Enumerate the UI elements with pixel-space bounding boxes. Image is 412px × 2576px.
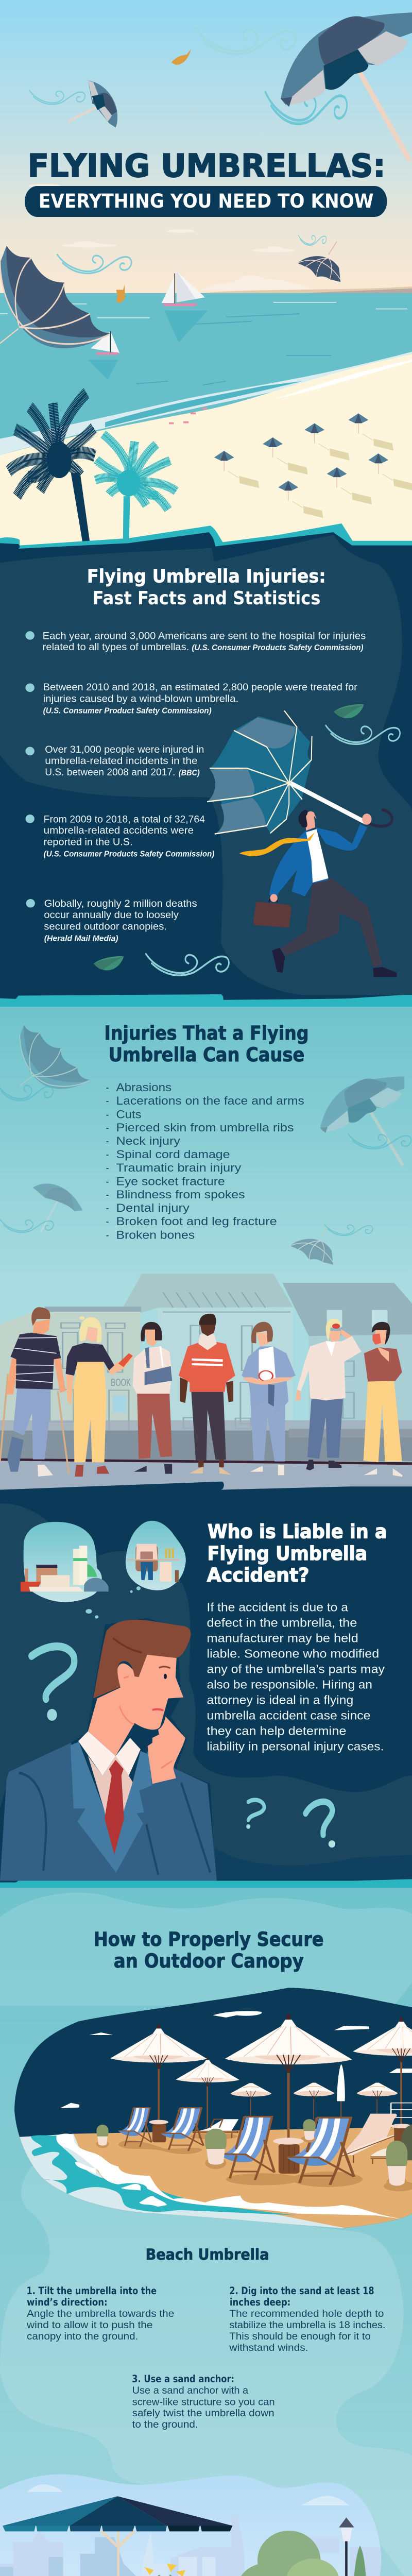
lighter blobs — [0, 1503, 412, 1879]
lamp post — [339, 2518, 354, 2576]
bullet 4: umbrella-related accidents were — [44, 824, 194, 836]
paragraph: liability: defect in the umbrella, the — [207, 1617, 357, 1630]
person 3 with arm sling — [133, 1322, 172, 1474]
illustration: thinking man — [0, 1620, 217, 1881]
heading: who is liable: Flying Umbrella — [208, 1543, 367, 1565]
bullet 2: Between 2010 and 2018, an estimated 2,800 people were treated for — [43, 681, 357, 692]
heading: Beach Umbrella — [146, 2246, 269, 2264]
injuries list: - — [106, 1095, 109, 1108]
tip 3: safely twist the umbrella down — [132, 2407, 274, 2419]
jacket — [269, 824, 367, 900]
bullet 5 — [26, 898, 197, 943]
icon: palm trees — [9, 393, 176, 542]
lighter blob — [0, 535, 412, 995]
briefcase — [253, 898, 291, 927]
sky — [0, 2471, 412, 2576]
tall plant — [354, 2545, 366, 2576]
small side tables — [149, 2120, 412, 2142]
icon: question marks — [31, 1647, 335, 1848]
injuries list: - — [106, 1202, 109, 1215]
water teal — [31, 2135, 297, 2215]
head — [270, 810, 371, 902]
large table — [273, 2138, 304, 2174]
heading — [105, 1022, 308, 1066]
injuries list: Broken foot and leg fracture — [116, 1215, 277, 1228]
bullet 4 — [25, 814, 215, 859]
injuries list: - — [106, 1176, 109, 1188]
heading: how to secure: an Outdoor Canopy — [114, 1950, 304, 1972]
sand — [0, 354, 412, 546]
injuries list: Neck injury — [116, 1135, 181, 1147]
sand shadows — [96, 2133, 412, 2191]
paragraph: liability — [207, 1601, 385, 1753]
injuries list: Abrasions — [116, 1081, 171, 1094]
bullet 4: reported in the U.S. — [44, 836, 133, 848]
planters — [96, 2119, 412, 2191]
teal strips — [0, 1482, 412, 1546]
title: FLYING UMBRELLAS: — [28, 148, 385, 185]
injuries list: - — [106, 1122, 109, 1134]
injuries list: - — [106, 1189, 109, 1201]
bullet 2 — [25, 681, 357, 716]
person 1 with crutches — [0, 1307, 69, 1477]
icon: inverted umbrella right — [298, 242, 340, 282]
bullet 4: From 2009 to 2018, a total of 32,764 — [44, 814, 205, 825]
parasols — [110, 2014, 412, 2101]
sea — [0, 293, 412, 517]
panel: injuries list — [0, 1007, 412, 1503]
panel: fast facts and statistics — [0, 523, 412, 1008]
injuries list: Cuts — [116, 1109, 141, 1121]
bullet 3: U.S. between 2008 and 2017. — [45, 766, 175, 778]
bullet 4: (U.S. Consumer Products Safety Commission) — [44, 850, 215, 859]
tip 1: Angle the umbrella towards the — [27, 2308, 174, 2319]
paragraph: liability: liable. Someone who modified — [207, 1648, 379, 1660]
heading: Injuries That a Flying — [105, 1022, 308, 1044]
heading: who is liable: Who is Liable in a — [208, 1520, 387, 1543]
lighter blobs — [0, 1893, 412, 2006]
bullet 3: Over 31,000 people were injured in — [45, 743, 204, 755]
paragraph: liability: attorney is ideal in a flying — [207, 1694, 353, 1707]
sea highlights — [0, 302, 407, 318]
tip 3: Use a sand anchor with a — [132, 2384, 248, 2396]
torn edge — [0, 523, 412, 1008]
injuries list: - — [106, 1081, 109, 1094]
deck chairs — [118, 2108, 274, 2180]
tree — [239, 2531, 339, 2576]
umbrella pole — [100, 2530, 135, 2576]
person 6 holding head — [296, 1319, 362, 1470]
tip 2: withstand winds. — [229, 2342, 308, 2353]
navy sky — [0, 1987, 412, 2231]
injuries list: - — [106, 1229, 109, 1242]
panel: who is liable — [0, 1482, 412, 1891]
injuries list: Lacerations on the face and arms — [116, 1095, 304, 1108]
tip 2: inches deep: — [230, 2297, 290, 2309]
sky background — [0, 0, 412, 294]
illustration: man with blown umbrella — [207, 710, 397, 977]
icon: inverted blown umbrella left — [0, 246, 110, 348]
tip 1: wind’s direction: — [27, 2297, 108, 2309]
panel: beach umbrella tips — [26, 2246, 385, 2430]
icon: faint swirls — [0, 1084, 411, 1235]
icon: wind swirls — [29, 28, 347, 274]
injuries list: Blindness from spokes — [116, 1189, 245, 1201]
clouds — [60, 2011, 412, 2108]
heading: Fast Facts and Statistics — [93, 587, 320, 609]
injuries list: - — [106, 1109, 109, 1121]
injuries list: - — [106, 1148, 109, 1161]
paragraph: liability: If the accident is due to a — [207, 1601, 349, 1614]
icon: leaves and wind — [94, 704, 400, 975]
bullet 1 — [25, 630, 366, 653]
heading: who is liable — [207, 1520, 387, 1586]
bullet 5: occur annually due to loosely — [44, 909, 179, 920]
illustration: beach with umbrellas and deck chairs — [0, 1987, 412, 2232]
panel: hero beach scene — [0, 0, 412, 546]
injuries list: Eye socket fracture — [116, 1176, 225, 1188]
road — [0, 1420, 412, 1502]
injuries list: - — [106, 1135, 109, 1147]
injuries list: - — [106, 1215, 109, 1228]
trousers — [280, 878, 382, 967]
bullet 5: secured outdoor canopies. — [44, 921, 167, 932]
tip 3: 3. Use a sand anchor: — [132, 2374, 234, 2385]
ghost umbrellas — [20, 1025, 404, 1265]
illustration: street with injured people — [0, 1274, 412, 1502]
heading — [87, 566, 326, 609]
sand — [0, 2127, 412, 2232]
sail boat large — [162, 271, 208, 343]
poles — [159, 2062, 401, 2140]
bullet 3: umbrella-related incidents in the — [45, 755, 198, 766]
background buildings: BOOK — [111, 1376, 131, 1388]
foam — [56, 2133, 412, 2221]
bullet 3: (BBC) — [179, 769, 200, 778]
bullet 5: (Herald Mail Media) — [44, 934, 118, 943]
shoreline foam — [0, 351, 412, 455]
beach umbrellas — [214, 413, 412, 518]
heading: who is liable: Accident? — [207, 1564, 310, 1586]
distant headland — [202, 286, 412, 293]
tip 3 — [132, 2374, 275, 2430]
right lounger — [342, 2113, 397, 2164]
tip 2: stabilize the umbrella is 18 inches. — [229, 2319, 385, 2331]
illustration: patio scene — [0, 2471, 412, 2576]
injuries list: - — [106, 1162, 109, 1175]
person 4 with neck brace — [179, 1314, 235, 1475]
tip 2: The recommended hole depth to — [229, 2308, 384, 2319]
skyline — [0, 2538, 381, 2576]
tip 2 — [229, 2285, 385, 2353]
bullet 3 — [25, 743, 204, 778]
navy background — [0, 1496, 412, 1883]
injuries list: Dental injury — [116, 1202, 190, 1215]
railing — [391, 2103, 412, 2119]
title: EVERYTHING YOU NEED TO KNOW — [39, 190, 374, 212]
shirt — [306, 829, 329, 883]
paragraph: liability: they can help determine — [207, 1724, 346, 1738]
icon: falling leaves — [116, 49, 191, 302]
tip 1: canopy into the ground. — [27, 2330, 138, 2342]
shoes — [272, 947, 397, 977]
heading: Flying Umbrella Injuries: — [87, 566, 326, 587]
icon: large flying umbrella — [281, 12, 412, 161]
tip 1: 1. Tilt the umbrella into the — [27, 2285, 157, 2297]
teal strip beneath panel — [0, 993, 412, 1007]
title — [25, 148, 387, 217]
injuries list: Pierced skin from umbrella ribs — [116, 1122, 294, 1134]
bullet 1: Each year, around 3,000 Americans are sent to the hospital for injuries — [43, 630, 366, 641]
sail boat small — [88, 331, 119, 380]
injuries list: Traumatic brain injury — [116, 1162, 242, 1175]
injuries list — [106, 1081, 304, 1242]
icon: small flying umbrella — [68, 80, 117, 127]
panel: how to secure background — [0, 1888, 412, 2576]
flowers and bottle — [144, 2564, 185, 2576]
inverted umbrella — [207, 710, 392, 834]
tip 3: screw-like structure so you can — [132, 2396, 275, 2408]
bullet 2: (U.S. Consumer Product Safety Commission) — [43, 706, 212, 716]
background lounger — [193, 2119, 238, 2138]
bullet 5: Globally, roughly 2 million deaths — [44, 898, 197, 909]
background buildings — [0, 1274, 412, 1438]
paragraph: liability: manufacturer may be held — [207, 1632, 358, 1645]
teal gradient background — [0, 1007, 412, 1503]
clouds — [29, 184, 315, 291]
heading: how to secure: How to Properly Secure — [94, 1928, 324, 1951]
section gradient — [0, 1888, 412, 2576]
person 7 with toothache — [364, 1322, 403, 1477]
tip 2: This should be enough for it to — [229, 2330, 371, 2342]
thought bubble: office — [126, 1521, 186, 1593]
injuries list: Spinal cord damage — [116, 1148, 230, 1161]
person 2 in yellow overalls — [66, 1316, 133, 1477]
tip 3: to the ground. — [132, 2418, 198, 2430]
bullet 1: (U.S. Consumer Products Safety Commission) — [192, 643, 364, 653]
tip 2: 2. Dig into the sand at least 18 — [229, 2285, 374, 2297]
paragraph: liability: liability in personal injury cases. — [207, 1740, 384, 1753]
pale water — [20, 2134, 345, 2228]
heading: Umbrella Can Cause — [109, 1044, 304, 1066]
thought bubble: factory — [21, 1522, 109, 1619]
tip 1 — [26, 2285, 174, 2342]
flamingos — [169, 408, 207, 424]
clouds — [27, 2484, 349, 2505]
bullet 2: injuries caused by a wind-blown umbrella. — [43, 693, 238, 704]
heading: how to secure — [94, 1928, 324, 1972]
paragraph: liability: umbrella accident case since — [207, 1709, 370, 1722]
navy background — [0, 532, 412, 1000]
person 5 holding stomach — [242, 1322, 296, 1475]
large deck chair — [287, 2117, 354, 2185]
tip 1: wind to allow it to push the — [26, 2319, 152, 2331]
injuries list: Broken bones — [116, 1229, 195, 1242]
paragraph: liability: also be responsible. Hiring an — [207, 1679, 372, 1691]
paragraph: liability: any of the umbrella’s parts may — [207, 1663, 385, 1676]
umbrella canopy — [3, 2496, 233, 2531]
tie — [239, 832, 315, 856]
bullet 1: related to all types of umbrellas. — [43, 641, 189, 653]
